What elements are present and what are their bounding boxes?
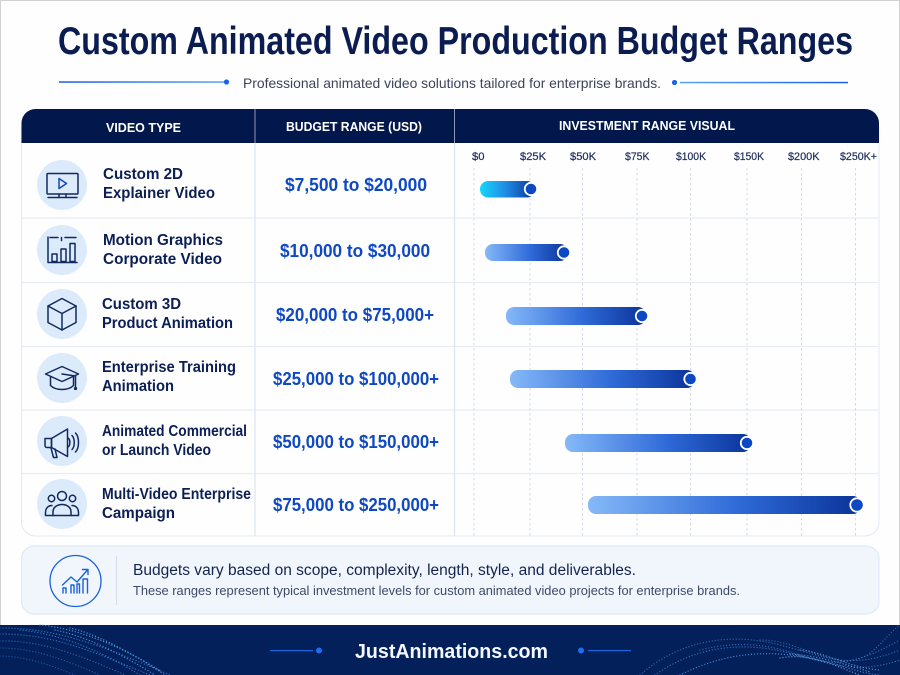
- axis labels: $25K: [520, 151, 547, 163]
- row: custom 2D explainer: Custom 2D: [103, 166, 183, 183]
- axis labels: $200K: [788, 151, 820, 163]
- row: custom 2D explainer: Explainer Video: [103, 185, 215, 202]
- icon: 3D box: [48, 298, 76, 330]
- row: commercial or launch: $50,000 to $150,000+: [273, 432, 439, 452]
- table header bar: INVESTMENT RANGE VISUAL: [559, 119, 735, 133]
- axis labels: [472, 151, 877, 163]
- row: custom 2D explainer: $7,500 to $20,000: [285, 175, 427, 195]
- row: custom 2D explainer: [37, 160, 537, 210]
- row: commercial or launch: [37, 416, 753, 466]
- icon: monitor with play button: [47, 174, 78, 198]
- row: enterprise training: Enterprise Training: [102, 359, 236, 376]
- callout panel: Budgets vary based on scope, complexity, length, style, and deliverables.: [133, 562, 636, 579]
- callout panel: [22, 546, 879, 614]
- table header bar: VIDEO TYPE: [106, 121, 181, 135]
- axis labels: $0: [472, 151, 484, 163]
- row: enterprise training: [37, 353, 697, 403]
- row: multi-video campaign: Campaign: [102, 505, 175, 522]
- decorative dot wave: right: [640, 625, 900, 675]
- row: custom 3D product: [37, 289, 648, 339]
- table header bar: [22, 109, 879, 143]
- row: motion graphics: $10,000 to $30,000: [280, 241, 430, 261]
- table body card: [22, 115, 879, 536]
- row: enterprise training: $25,000 to $100,000+: [273, 369, 439, 389]
- table panel: [22, 109, 879, 536]
- row: multi-video campaign: Multi-Video Enterprise: [102, 486, 251, 503]
- row: motion graphics: Corporate Video: [103, 251, 222, 268]
- row: custom 3D product: Product Animation: [102, 315, 233, 332]
- footer band: [0, 625, 900, 675]
- row: commercial or launch: or Launch Video: [102, 442, 211, 459]
- axis labels: $75K: [625, 151, 650, 163]
- icon: graduation cap: [46, 366, 78, 390]
- row and column rules: [22, 143, 879, 536]
- table header bar: BUDGET RANGE (USD): [286, 120, 422, 134]
- row: multi-video campaign: [37, 479, 864, 529]
- row: enterprise training: Animation: [102, 378, 174, 395]
- axis labels: $250K+: [840, 151, 877, 163]
- row: multi-video campaign: $75,000 to $250,000+: [273, 495, 439, 515]
- range bar: enterprise training: [510, 370, 697, 388]
- range bar: motion graphics: [485, 244, 570, 261]
- range bar: commercial: [565, 434, 753, 452]
- axis grid lines: [474, 168, 856, 536]
- range bar: 2D explainer: [480, 181, 537, 198]
- range bar: multi-video: [588, 496, 864, 514]
- row: commercial or launch: Animated Commercial: [102, 423, 247, 440]
- row: motion graphics: Motion Graphics: [103, 232, 223, 249]
- axis labels: $100K: [676, 151, 707, 163]
- row: custom 3D product: $20,000 to $75,000+: [276, 305, 434, 325]
- decorative dot wave: left: [0, 625, 170, 675]
- axis labels: $50K: [570, 151, 597, 163]
- icon: growth chart in circle: [50, 556, 101, 606]
- icon: group of people: [46, 492, 78, 516]
- icon: megaphone: [45, 429, 78, 458]
- footer band: JustAnimations.com: [355, 641, 548, 663]
- icon: bar chart screen: [48, 237, 77, 262]
- callout panel: These ranges represent typical investment levels for custom animated video projects for enterprise brands.: [133, 584, 740, 598]
- subtitle with decorative lines: [59, 75, 848, 91]
- row: custom 3D product: Custom 3D: [102, 296, 181, 313]
- row: motion graphics: [37, 225, 570, 275]
- subtitle with decorative lines: Professional animated video solutions tailored for enterprise brands.: [243, 75, 661, 91]
- range bar: 3D product: [506, 307, 648, 325]
- axis labels: $150K: [734, 151, 765, 163]
